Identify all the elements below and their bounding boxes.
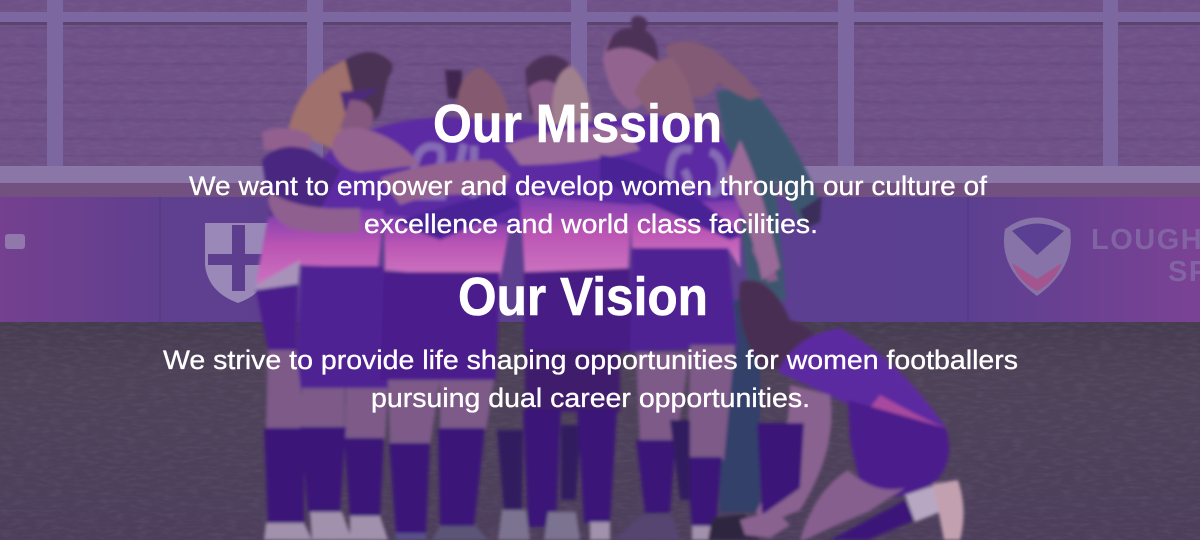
team huddle of players — [256, 16, 964, 540]
bare legs — [266, 345, 735, 460]
pink lower jerseys — [256, 195, 740, 292]
grass pitch — [0, 322, 1200, 540]
linked arms — [268, 128, 780, 280]
vision statement: We strive to provide life shaping opportunities for women footballers — [163, 345, 1018, 375]
vision statement — [163, 345, 1018, 413]
purple advertising banner — [0, 197, 1200, 322]
back-row heads and hair — [288, 16, 696, 150]
vision statement: pursuing dual career opportunities. — [371, 383, 810, 413]
banner lettering — [1091, 224, 1200, 288]
banner crest: club logo — [1004, 218, 1071, 296]
banner seams — [160, 197, 968, 322]
raised arm at far left — [262, 128, 312, 150]
purple shorts — [256, 248, 738, 388]
banner crest: university shield — [205, 223, 271, 303]
brown strip below ledge — [0, 183, 1200, 197]
heading: our mission: Our Mission — [433, 94, 722, 154]
wooden wall — [0, 0, 1200, 166]
mission statement: We want to empower and develop women through our culture of — [189, 171, 988, 201]
crouching player — [739, 280, 964, 540]
text: our mission — [189, 94, 988, 239]
faded shirt numbers — [414, 144, 722, 198]
fence rail and posts — [0, 0, 1200, 166]
purple socks — [264, 410, 722, 533]
mission statement: excellence and world class facilities. — [364, 209, 818, 239]
purple upper jerseys — [262, 115, 752, 235]
mission statement — [189, 171, 988, 239]
text: our vision — [163, 267, 1018, 413]
concrete ledge — [0, 166, 1200, 183]
heading: our vision: Our Vision — [458, 267, 708, 327]
goalkeeper — [666, 41, 822, 512]
small banner badge — [5, 234, 25, 249]
boots and white ankles — [264, 510, 760, 540]
